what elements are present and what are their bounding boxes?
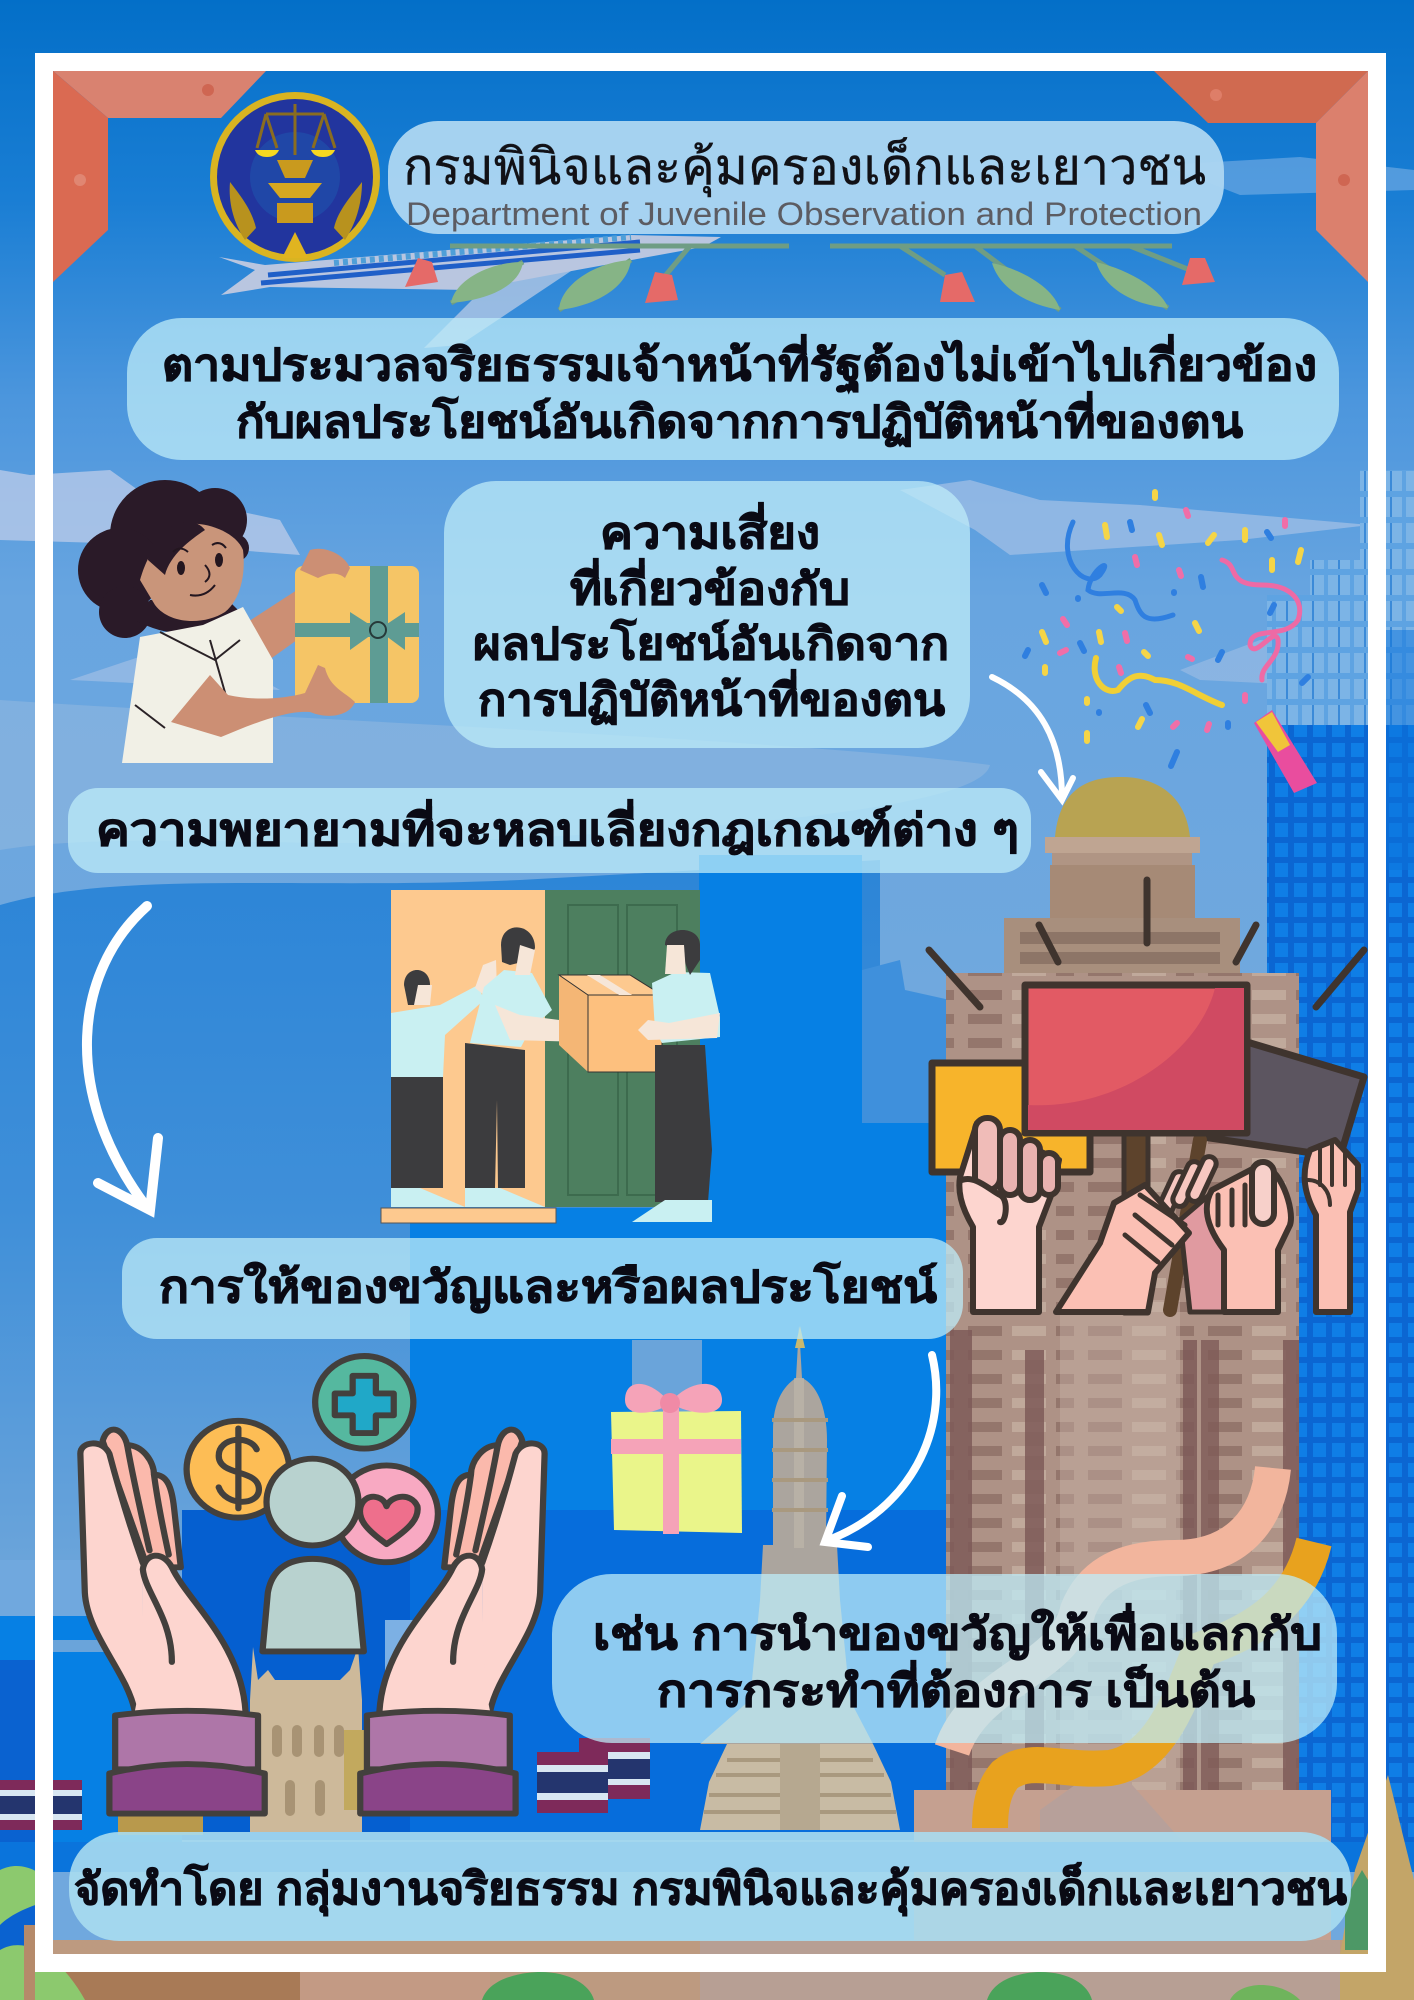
heading pill: code of ethics — [127, 318, 1339, 460]
garland: left branch — [405, 246, 789, 310]
pill: avoiding rules: ความพยายามที่จะหลบเลี่ยงกฎเกณฑ์ต่าง ๆ — [96, 799, 1019, 855]
heading pill: code of ethics: กับผลประโยชน์อันเกิดจากการปฏิบัติหน้าที่ของตน — [236, 391, 1243, 447]
person middle — [465, 927, 592, 1207]
arrow: avoidance to gifts — [87, 906, 158, 1210]
right hand — [360, 1430, 545, 1814]
pill: gifts and benefits: การให้ของขวัญและหรือผลประโยชน์ — [159, 1260, 938, 1313]
person — [262, 1459, 364, 1651]
pill: example of gifting: เช่น การนำของขวัญให้เพื่อแลกกับ — [593, 1603, 1322, 1660]
header pill: department name: กรมพินิจและคุ้มครองเด็กและเยาวชน — [403, 137, 1206, 197]
fist right — [1305, 1140, 1358, 1312]
person right — [632, 930, 720, 1222]
arrow: risk to avoidance — [992, 677, 1073, 800]
glass tower — [1267, 470, 1414, 1853]
illustration: people passing a box at a door — [381, 890, 720, 1223]
mid left hand — [1056, 1185, 1189, 1312]
illustration: woman holding a gift — [78, 480, 419, 763]
arrow: gifts to example — [825, 1355, 936, 1547]
corner banner: top left — [53, 71, 266, 282]
pill: risk statement — [444, 481, 970, 748]
pill: example of gifting: การกระทำที่ต้องการ เป็นต้น — [657, 1660, 1255, 1716]
icon: heart — [335, 1465, 438, 1562]
left hand — [80, 1430, 265, 1814]
icon: plus — [315, 1356, 413, 1449]
left temple — [118, 1647, 368, 1835]
cardboard box — [559, 975, 662, 1072]
mid fist — [1156, 1154, 1235, 1312]
person left — [391, 960, 497, 1207]
icon: party popper — [1254, 710, 1317, 793]
icon: dollar coin — [187, 1421, 289, 1518]
corner banner: top right — [1154, 71, 1368, 282]
pill: risk statement: ผลประโยชน์อันเกิดจาก — [473, 617, 949, 669]
pill: risk statement: ความเสี่ยง — [600, 502, 820, 558]
footer pill: producer credit: จัดทำโดย กลุ่มงานจริยธรรม กรมพินิจและคุ้มครองเด็กและเยาวชน — [74, 1862, 1347, 1917]
pill: example of gifting — [552, 1574, 1337, 1743]
mid right hand — [1207, 1162, 1291, 1312]
header pill: department name: Department of Juvenile Observation and Protection — [406, 196, 1202, 232]
pill: risk statement: ที่เกี่ยวข้องกับ — [570, 558, 850, 614]
pill: risk statement: การปฏิบัติหน้าที่ของตน — [478, 669, 945, 725]
pill: avoiding rules — [68, 788, 1031, 873]
Thai flags — [0, 1738, 650, 1830]
heading pill: code of ethics: ตามประมวลจริยธรรมเจ้าหน้าที่รัฐต้องไม่เข้าไปเกี่ยวข้อง — [162, 334, 1317, 393]
illustration: confetti — [1025, 492, 1308, 766]
illustration: protest signs and raised fists — [929, 880, 1364, 1313]
header pill: department name — [388, 121, 1224, 234]
icon: yellow gift box — [611, 1384, 742, 1534]
airplane — [219, 235, 721, 348]
garland: right branch — [830, 246, 1215, 310]
bottom city strip — [0, 1775, 1414, 2000]
illustration: caring hands with person and icons — [80, 1356, 545, 1814]
pill: gifts and benefits — [122, 1238, 963, 1339]
logo: department seal — [210, 92, 380, 262]
footer pill: producer credit — [69, 1832, 1351, 1941]
brown tower — [914, 777, 1331, 1960]
temple spire — [700, 1326, 900, 1830]
decorative ribbons: peach and orange — [952, 1468, 1314, 1828]
fist left — [959, 1118, 1059, 1312]
confetti streamers — [1067, 522, 1300, 705]
